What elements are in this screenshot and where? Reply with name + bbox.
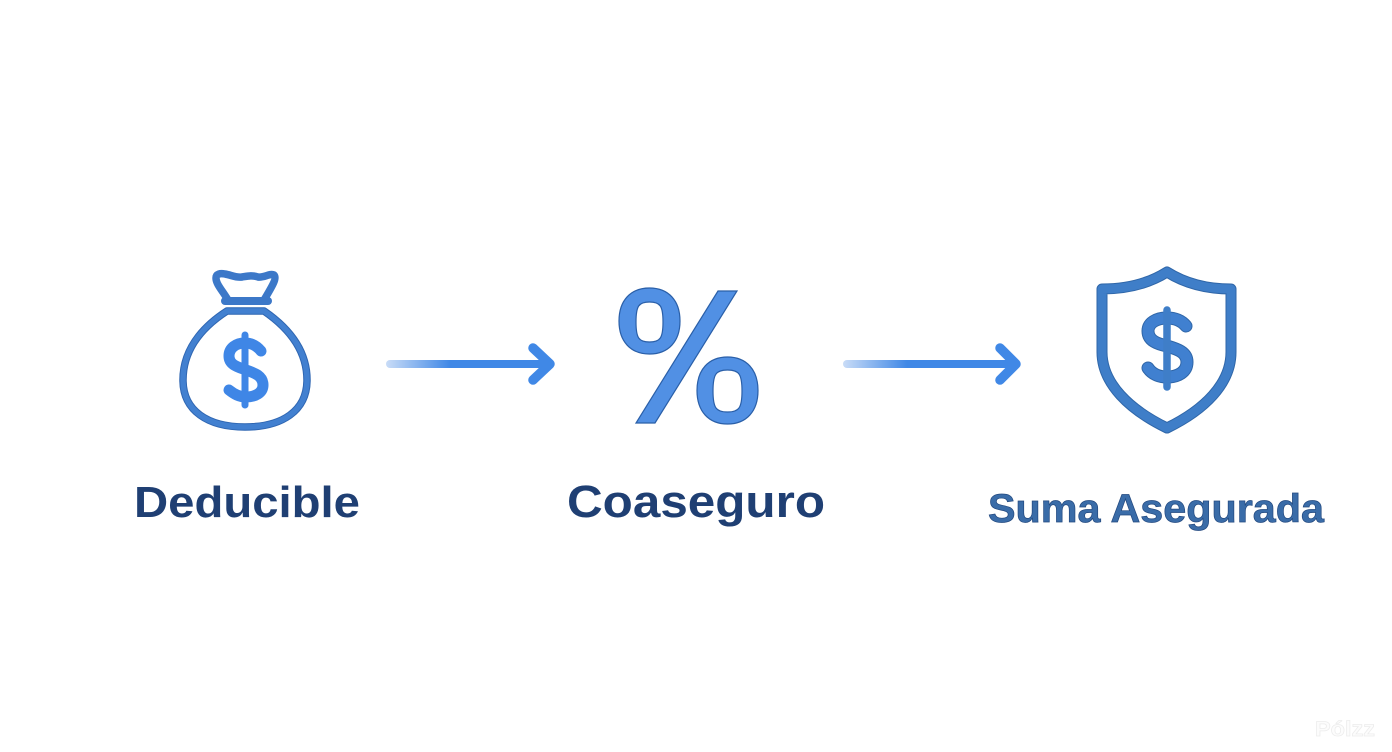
label: Suma Asegurada: Suma Asegurada [988, 487, 1325, 531]
arrow: deducible to coaseguro [390, 348, 550, 380]
panel: deducible [134, 274, 360, 527]
label: Deducible: Deducible [134, 478, 360, 527]
watermark: Pólzz [1315, 718, 1375, 741]
icon: shield with dollar [1102, 272, 1231, 428]
panel: suma asegurada [988, 272, 1325, 531]
icon: money bag [183, 274, 307, 427]
arrow: coaseguro to suma asegurada [847, 348, 1016, 380]
icon: percent sign [619, 288, 758, 424]
label: Coaseguro: Coaseguro [567, 476, 825, 527]
panel: coaseguro [567, 288, 825, 527]
